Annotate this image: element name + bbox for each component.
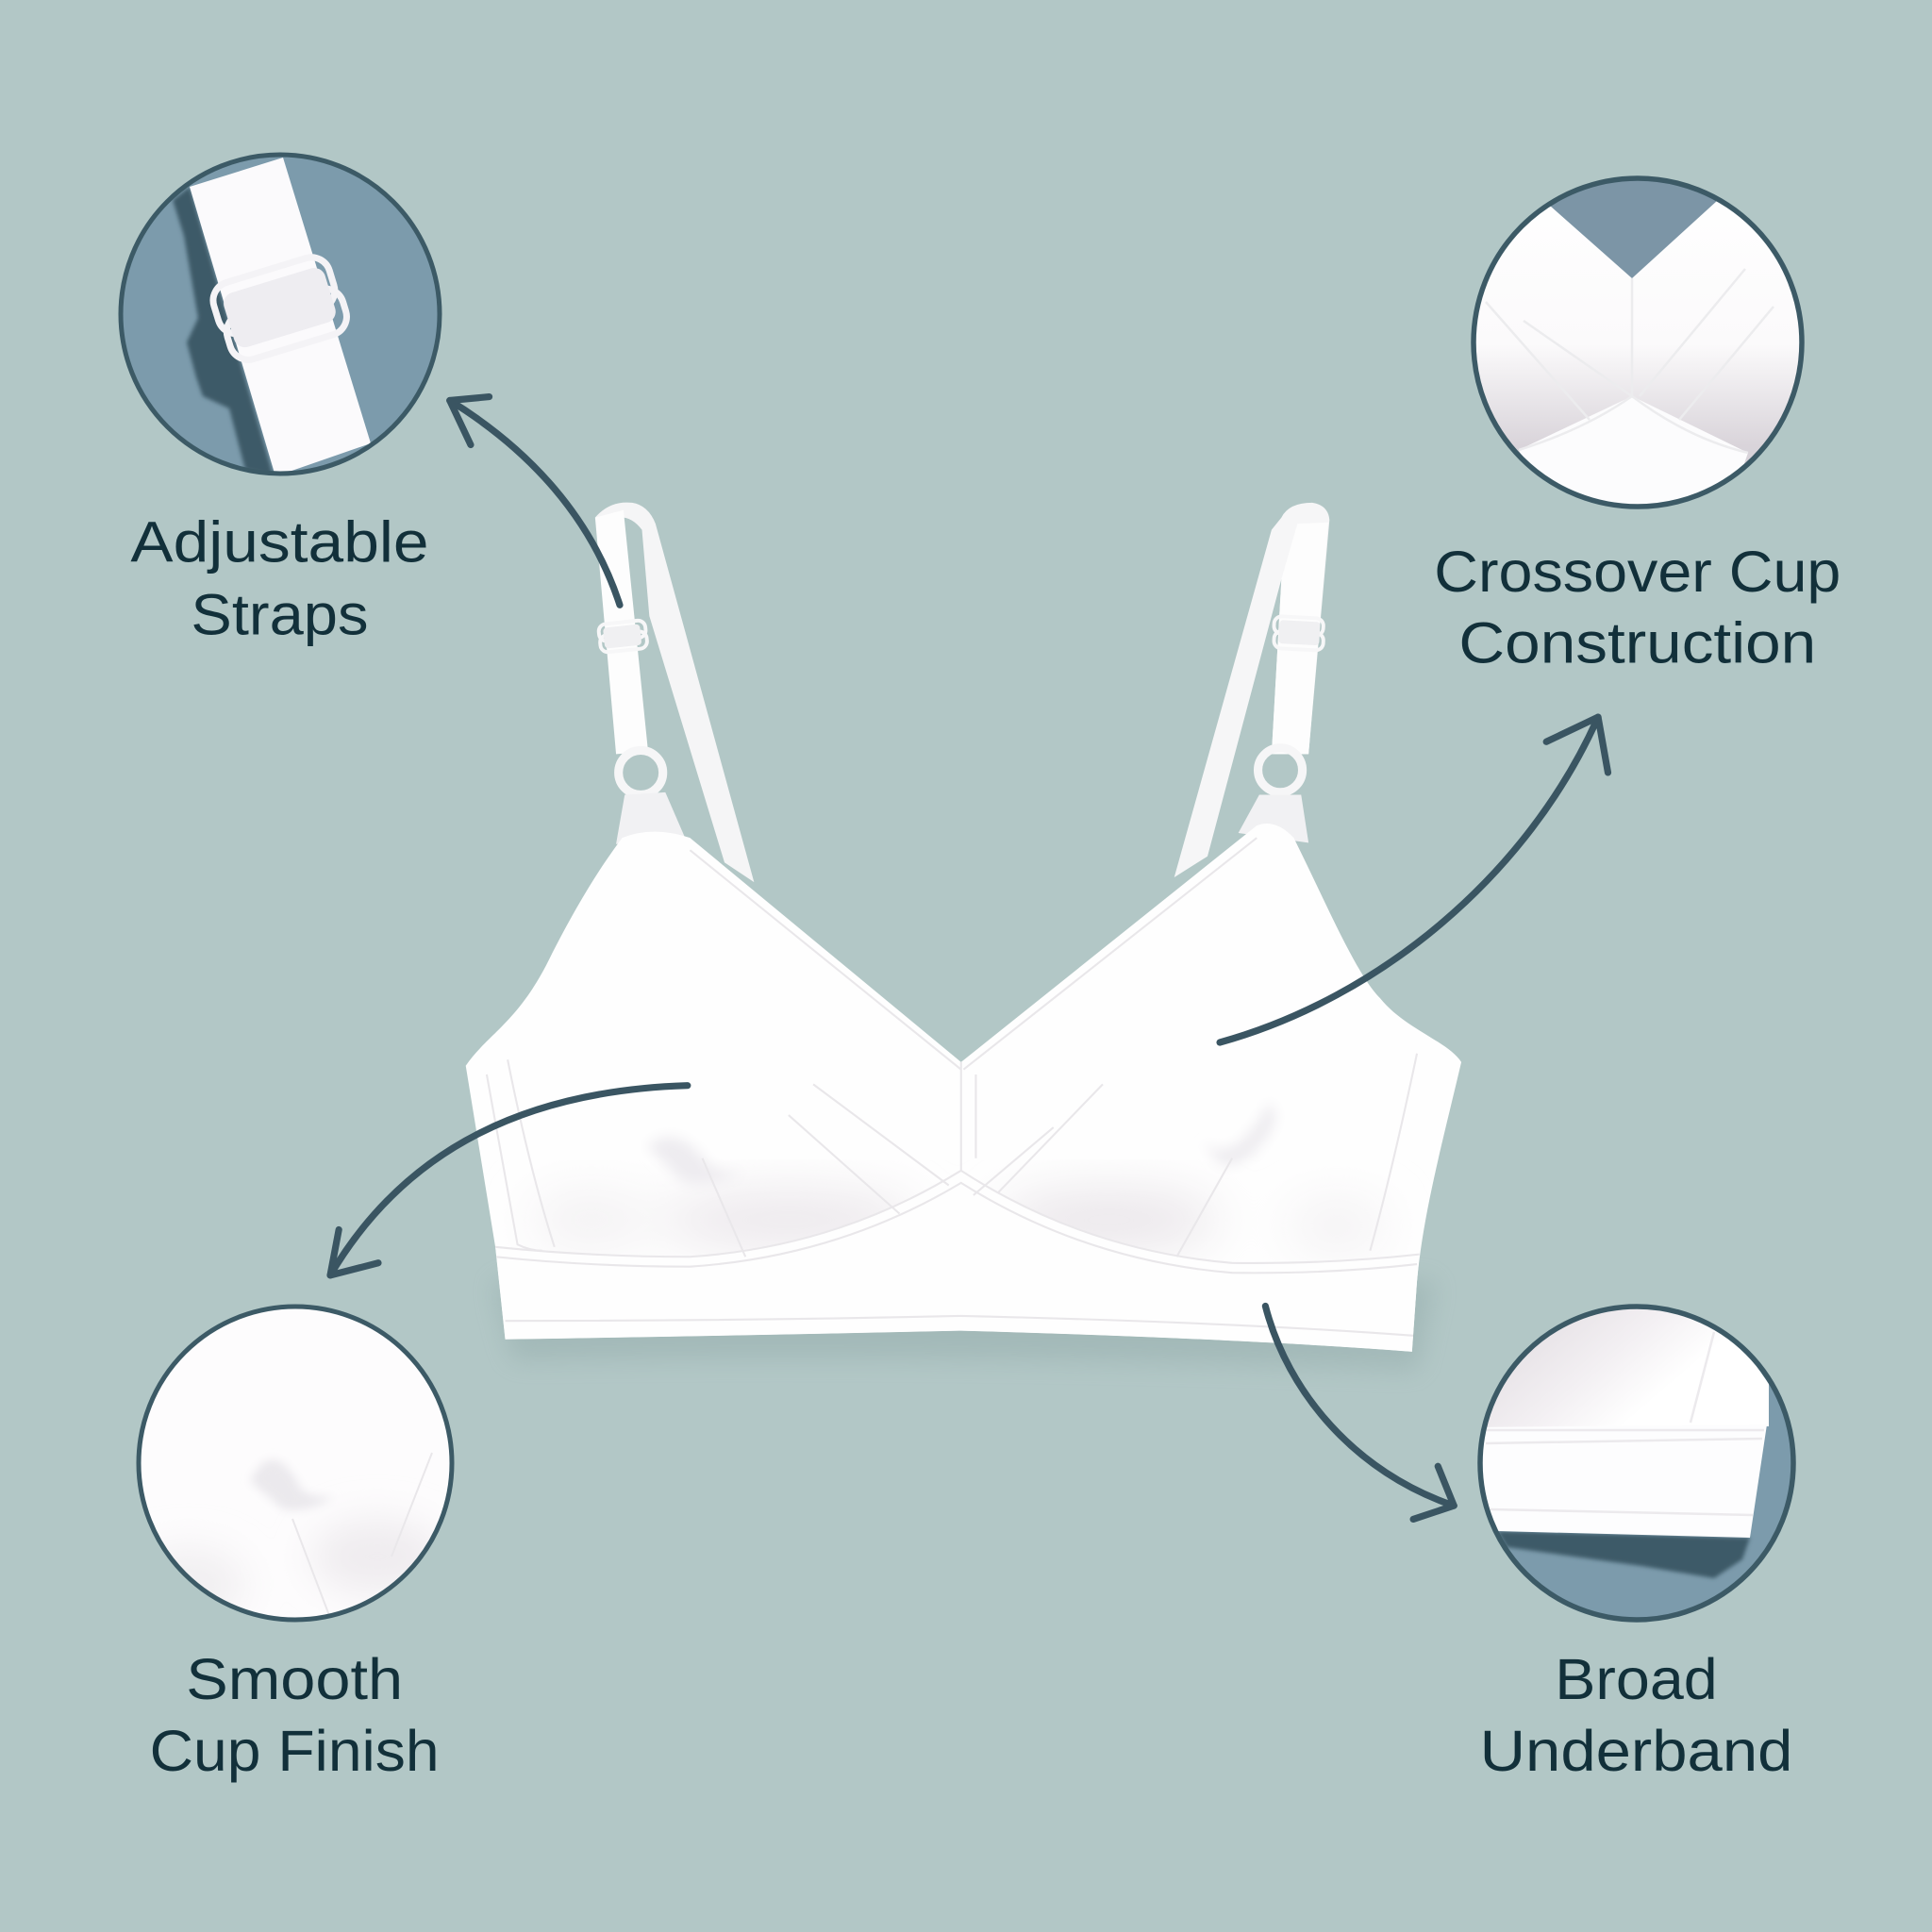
infographic canvas xyxy=(119,153,1839,1783)
drop shadow xyxy=(492,1281,1436,1370)
circle detail: crossover cup xyxy=(1467,170,1811,514)
cup bumps xyxy=(652,1110,1274,1183)
arrow: to broad underband xyxy=(1265,1306,1454,1519)
label: smooth cup finish: Smooth xyxy=(186,1647,403,1712)
label: adjustable straps: Adjustable xyxy=(130,510,429,575)
label: adjustable straps xyxy=(130,510,429,648)
arrow: to smooth cup finish xyxy=(330,1086,688,1275)
arrow: to crossover cup construction xyxy=(1220,717,1607,1042)
bra body xyxy=(466,824,1461,1352)
label: broad underband xyxy=(1480,1647,1792,1784)
label: crossover cup construction: Construction xyxy=(1458,611,1816,676)
seams xyxy=(487,838,1420,1336)
circle detail: adjustable strap xyxy=(113,151,443,481)
arrow: to adjustable straps xyxy=(450,397,620,605)
circle detail: broad underband xyxy=(1472,1302,1802,1627)
label: smooth cup finish: Cup Finish xyxy=(150,1719,440,1784)
right strap xyxy=(1174,503,1329,877)
label: smooth cup finish xyxy=(150,1647,440,1784)
left strap xyxy=(595,503,754,882)
label: adjustable straps: Straps xyxy=(191,583,369,648)
label: broad underband: Underband xyxy=(1480,1719,1792,1784)
label: broad underband: Broad xyxy=(1555,1647,1718,1712)
label: crossover cup construction xyxy=(1434,540,1840,676)
bra illustration xyxy=(466,503,1461,1370)
cup shading xyxy=(566,1181,1208,1253)
circle detail: smooth cup xyxy=(132,1302,458,1627)
label: crossover cup construction: Crossover Cup xyxy=(1434,540,1840,605)
underband xyxy=(495,1204,1419,1352)
